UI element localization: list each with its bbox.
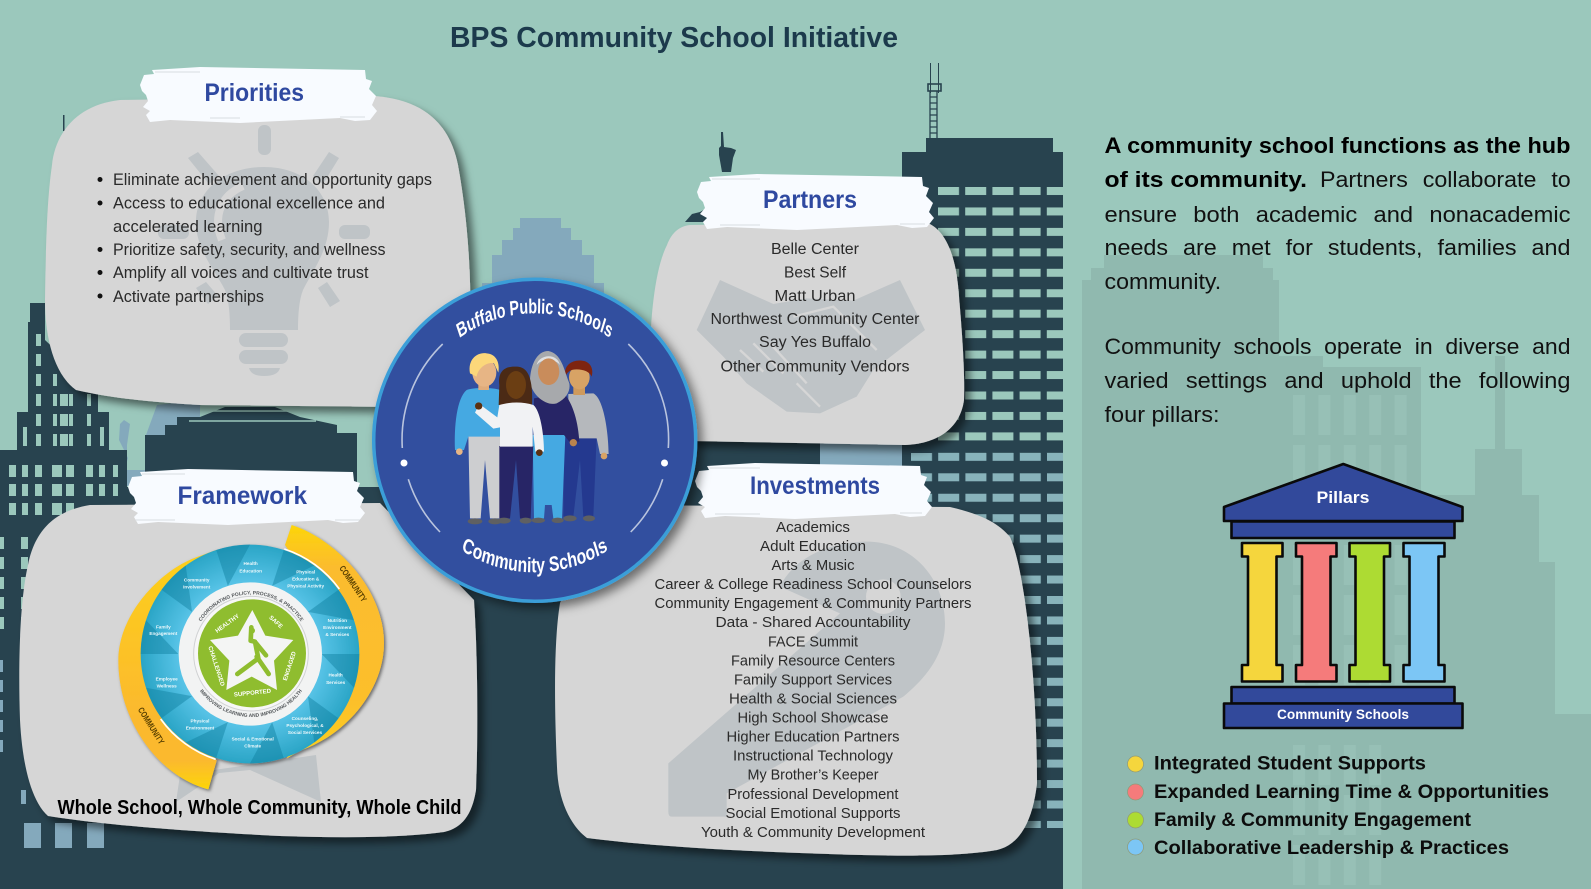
faded skyline behind right column [1082, 255, 1591, 889]
wheel green centre with star: SAFE [267, 615, 283, 630]
wheel green centre with star: ENGAGED [283, 650, 298, 682]
panel: framework [19, 503, 486, 846]
chart: whole child wheel [118, 525, 388, 792]
wheel segment labels: Education [239, 569, 262, 574]
community labels: COMMUNITY [136, 705, 167, 746]
medallion: Buffalo Public Schools Community Schools [370, 276, 709, 614]
wheel white ring: IMPROVING LEARNING AND IMPROVING HEALTH [200, 689, 302, 717]
wheel segment labels: Physical Activity [287, 584, 324, 589]
text block: pillars intro: four pillars: [1104, 402, 1220, 427]
legend: four pillars: Family & Community Engagement [1154, 810, 1472, 831]
wheel segment labels: Psychological, & [286, 723, 324, 728]
bullet list: priorities: Eliminate achievement and opportunity gaps [113, 171, 432, 189]
icon: star watermark [176, 755, 321, 802]
heading banner: framework: Framework [178, 482, 307, 510]
icon: handshake watermark [697, 280, 925, 413]
text block: intro paragraph: of its community. [1104, 167, 1307, 192]
wheel segment labels: & Services [325, 632, 350, 637]
wheel segment labels: Employee [156, 677, 178, 682]
list: partners: Matt Urban [774, 288, 856, 305]
list: investments: Academics [776, 519, 850, 536]
icon: number watermark [668, 542, 945, 817]
wheel white ring: COORDINATING POLICY, PROCESS, & PRACTICE [198, 590, 304, 622]
wheel segment labels: Environment [186, 726, 215, 731]
wheel wedges shading [141, 545, 359, 763]
wheel segment labels: Family [156, 624, 171, 629]
text block: intro paragraph [1104, 133, 1571, 294]
list: investments: Arts & Music [772, 557, 855, 574]
panel: partners [650, 222, 964, 445]
pillars base label: Community Schools [1277, 707, 1409, 722]
text block: pillars intro [1104, 334, 1570, 427]
pillars roof label: Pillars [1316, 488, 1370, 507]
list: investments: Adult Education [760, 538, 866, 555]
bullet list: priorities: Activate partnerships [113, 288, 264, 306]
wheel white ring [178, 582, 322, 726]
medallion thin arcs and dots [400, 344, 669, 532]
panel: priorities [45, 96, 470, 407]
heading banner: priorities: Priorities [204, 79, 304, 107]
panel: investments [555, 505, 1037, 856]
list: investments: Data - Shared Accountability [716, 614, 911, 631]
wheel segment labels: Engagement [149, 631, 178, 636]
icon: light bulb watermark [158, 125, 370, 376]
statue on partners banner [685, 132, 736, 222]
wheel green centre with star: HEALTHY [215, 614, 241, 635]
wheel segment labels: Social Services [288, 730, 322, 735]
heading banner: partners: Partners [763, 186, 857, 214]
thin antenna above priorities card [63, 115, 64, 131]
list: investments: Family Support Services [734, 672, 892, 688]
wheel segment labels: Social & Emotional [232, 736, 274, 741]
wheel segment labels: Nutrition [328, 618, 347, 623]
list: investments: Professional Development [728, 786, 899, 803]
title: BPS Community School Initiative [450, 22, 898, 54]
dark block right of medallion [690, 440, 820, 500]
pale blue block beside tall tower [820, 440, 902, 500]
list: partners: Other Community Vendors [720, 358, 910, 376]
wheel segment labels: Wellness [157, 683, 177, 688]
list: investments: FACE Summit [768, 634, 859, 650]
blue dome building [482, 218, 604, 490]
wheel segment labels: Environment [323, 625, 352, 630]
list: investments [654, 519, 972, 841]
text block: intro paragraph: A community school functions as the hub [1104, 133, 1570, 158]
bullet list: priorities: Amplify all voices and cultivate trust [113, 264, 369, 282]
wheel segment labels: Services [326, 680, 346, 685]
bullet list: priorities: accelerated learning [113, 218, 262, 236]
list: investments: Community Engagement & Community Partners [654, 595, 972, 612]
wheel segment labels: Physical [296, 570, 315, 575]
central domed building [145, 407, 357, 500]
community labels: COMMUNITY [337, 564, 369, 604]
text block: pillars intro: Community schools operate in diverse and [1104, 334, 1570, 359]
framework caption: Whole School, Whole Community, Whole Child [58, 797, 462, 819]
legend: four pillars [1128, 754, 1549, 859]
list: partners: Say Yes Buffalo [759, 334, 871, 351]
text block: intro paragraph: Partners collaborate to [1320, 167, 1571, 192]
tall tower with antenna [902, 63, 1063, 889]
list: partners: Northwest Community Center [710, 311, 920, 328]
list: investments: Social Emotional Supports [726, 805, 900, 822]
wheel green centre with star [198, 599, 306, 707]
legend: four pillars: Expanded Learning Time & Opportunities [1154, 782, 1549, 803]
wheel segment labels: Climate [244, 743, 261, 748]
list: partners: Best Self [784, 264, 847, 282]
wheel green centre with star: CHALLENGED [206, 646, 225, 688]
illustration: four people [455, 351, 609, 524]
pillar: blue [1404, 543, 1444, 682]
heading banner: investments [695, 463, 932, 519]
list: investments: Career & College Readiness School Counselors [654, 576, 972, 593]
list: investments: Youth & Community Development [701, 824, 926, 841]
list: investments: Family Resource Centers [731, 652, 895, 670]
medallion curved text bottom: Community Schools [463, 539, 607, 577]
wheel segment labels: Physical [191, 719, 209, 724]
bullet list: priorities [98, 171, 432, 306]
list: investments: Instructional Technology [733, 748, 893, 764]
list: investments: Health & Social Sciences [729, 690, 897, 708]
diagram: pillars temple [1224, 464, 1462, 728]
bullet list: priorities: Access to educational excellence and [113, 194, 385, 212]
text block: pillars intro: varied settings and uphold the following [1104, 368, 1570, 393]
wheel segment labels: Health [329, 673, 343, 678]
list: investments: Higher Education Partners [726, 728, 900, 746]
left skyline tower [0, 303, 200, 889]
heading banner: partners [697, 174, 934, 230]
medallion curved text top: Buffalo Public Schools [456, 298, 612, 338]
bullet list: priorities: Prioritize safety, security, and wellness [113, 241, 386, 259]
pillar: yellow [1242, 543, 1282, 682]
wheel segment labels: Health [244, 561, 258, 566]
list: investments: My Brother’s Keeper [748, 766, 878, 784]
list: partners [710, 241, 920, 376]
heading banner: priorities [140, 67, 377, 123]
pillar: green [1350, 543, 1390, 682]
wheel segment labels: Involvement [183, 585, 211, 590]
text block: intro paragraph: community. [1104, 269, 1221, 294]
legend: four pillars: Collaborative Leadership & Practices [1154, 838, 1509, 859]
list: investments: High School Showcase [738, 710, 888, 726]
wheel green centre with star: SUPPORTED [234, 689, 272, 699]
text block: intro paragraph: needs are met for students, families and [1104, 235, 1570, 260]
legend: four pillars: Integrated Student Supports [1154, 754, 1426, 774]
pillar: red [1296, 543, 1336, 682]
wheel segment labels: Community [184, 578, 210, 583]
wheel segment labels: Education & [292, 577, 320, 582]
list: partners: Belle Center [771, 241, 859, 258]
text block: intro paragraph: ensure both academic and nonacademic [1104, 202, 1570, 227]
wheel segment labels: Counseling, [292, 716, 318, 721]
heading banner: investments: Investments [750, 472, 880, 500]
wheel segment labels [149, 561, 352, 748]
heading banner: framework [128, 469, 365, 525]
community labels [136, 564, 369, 746]
dark ground [0, 487, 1063, 889]
